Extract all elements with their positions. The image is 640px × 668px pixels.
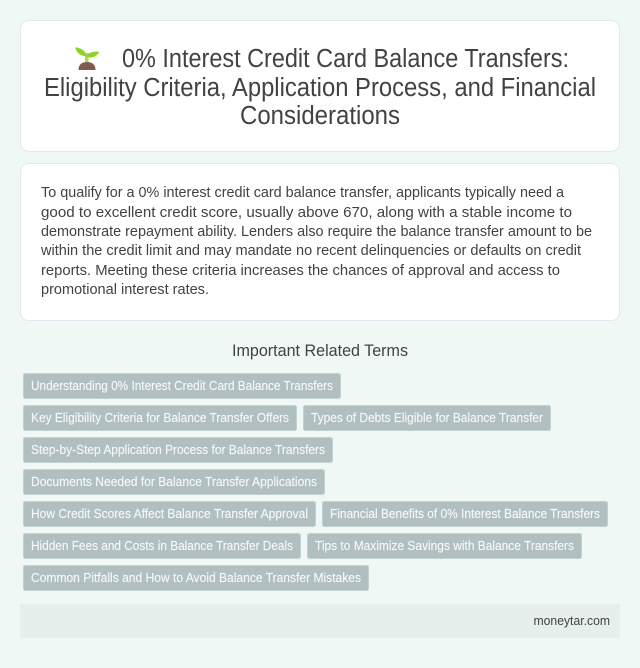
tag	[24, 374, 340, 398]
tag	[24, 470, 324, 494]
tag	[24, 566, 368, 590]
panel: description card	[20, 164, 620, 320]
description text: demonstrate repayment ability. Lenders also require the balance transfer amount to be	[41, 223, 592, 240]
description text: reports. Meeting these criteria increases the chances of approval and access to	[41, 262, 560, 279]
heading: important related terms: Important Related Terms	[232, 342, 408, 360]
title text	[44, 45, 596, 130]
icon: seedling	[75, 47, 99, 70]
tag: Hidden Fees and Costs in Balance Transfer Deals	[31, 538, 293, 553]
tag	[322, 502, 608, 526]
title text: Eligibility Criteria, Application Process, and Financial	[44, 74, 596, 102]
tag	[308, 534, 582, 558]
tag: How Credit Scores Affect Balance Transfer Approval	[31, 506, 308, 521]
tag: Common Pitfalls and How to Avoid Balance Transfer Mistakes	[31, 570, 361, 585]
tag	[24, 502, 316, 526]
title text: Considerations	[240, 102, 400, 130]
tag: Types of Debts Eligible for Balance Transfer	[311, 410, 544, 425]
description text: To qualify for a 0% interest credit card balance transfer, applicants typically need a	[41, 184, 565, 201]
tag	[304, 406, 550, 430]
description text	[40, 184, 592, 298]
description text: good to excellent credit score, usually above 670, along with a stable income to	[41, 204, 572, 221]
description text: within the credit limit and may mandate no recent delinquencies or defaults on credit	[40, 242, 582, 259]
panel: title card	[20, 20, 620, 152]
footer	[20, 604, 620, 638]
description text: promotional interest rates.	[41, 281, 209, 298]
tag	[24, 438, 332, 462]
tag: Tips to Maximize Savings with Balance Transfers	[315, 538, 574, 553]
title text: 0% Interest Credit Card Balance Transfers:	[122, 45, 569, 73]
tag: Key Eligibility Criteria for Balance Transfer Offers	[31, 410, 289, 425]
tag: Understanding 0% Interest Credit Card Balance Transfers	[31, 378, 333, 393]
tag: Financial Benefits of 0% Interest Balance Transfers	[330, 506, 600, 521]
tag	[24, 534, 300, 558]
tag: Documents Needed for Balance Transfer Applications	[31, 474, 317, 489]
tag: Step-by-Step Application Process for Balance Transfers	[31, 442, 325, 457]
panel: related term tags	[24, 374, 608, 590]
tag	[24, 406, 296, 430]
footer source text: moneytar.com	[534, 614, 610, 628]
